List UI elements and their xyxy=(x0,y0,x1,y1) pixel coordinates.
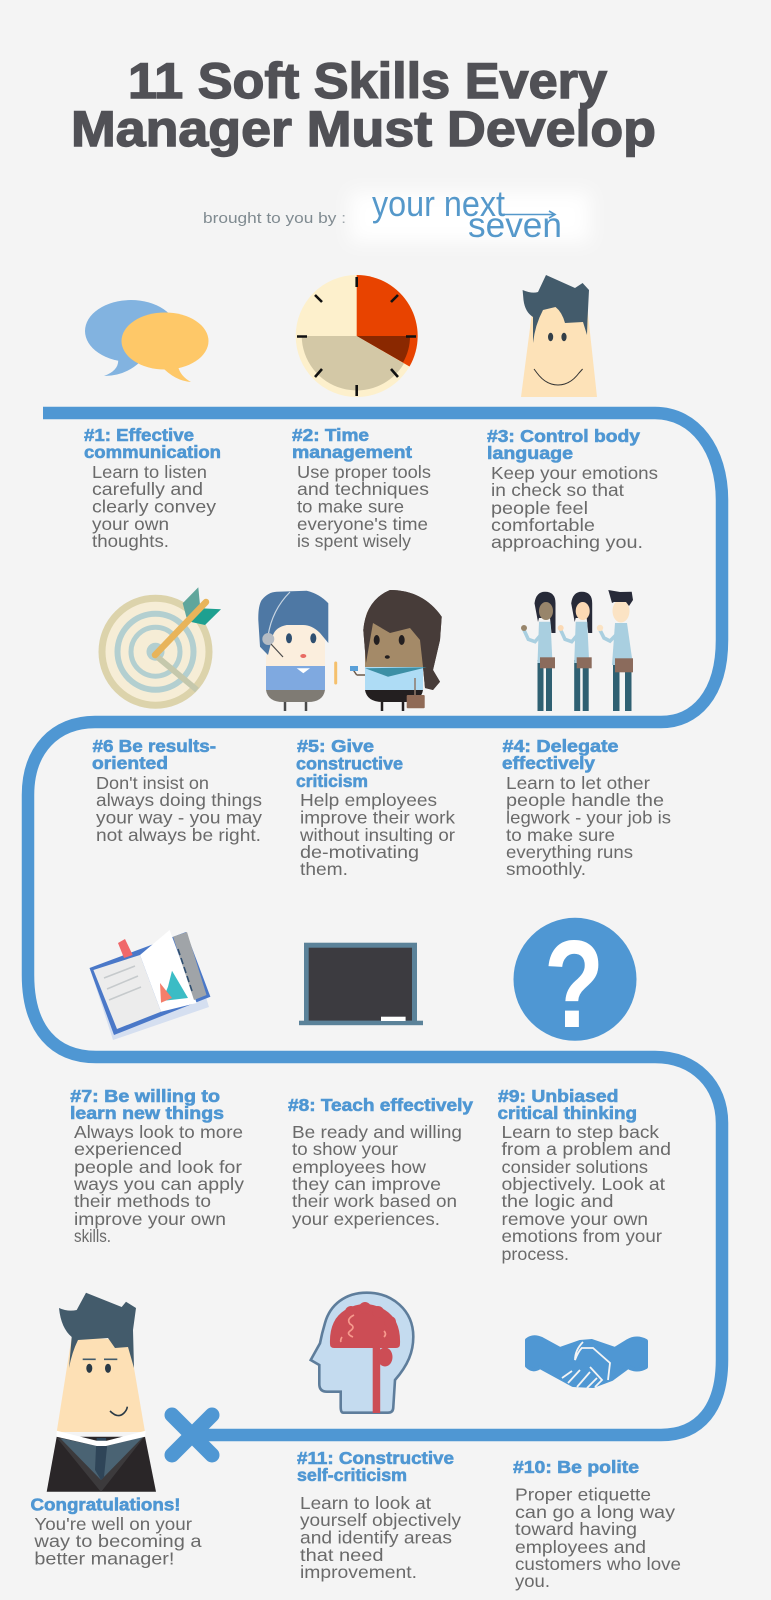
body text: you. xyxy=(515,1571,550,1591)
body text: your experiences. xyxy=(292,1209,440,1229)
body text: and identify areas xyxy=(300,1528,452,1548)
body text: to show your xyxy=(292,1139,398,1159)
body text: Proper etiquette xyxy=(515,1484,651,1504)
body text: that need xyxy=(300,1545,384,1565)
body text: Learn to look at xyxy=(300,1493,431,1513)
body text: better manager! xyxy=(34,1548,174,1568)
body text xyxy=(299,790,455,879)
heading xyxy=(498,1086,637,1123)
body text: legwork - your job is xyxy=(506,808,671,828)
body text: customers who love xyxy=(515,1554,681,1574)
title: 11 Soft Skills Every xyxy=(128,53,607,109)
body text xyxy=(515,1484,681,1591)
body text: yourself objectively xyxy=(300,1510,461,1530)
body text: Learn to step back xyxy=(502,1122,659,1142)
body text: objectively. Look at xyxy=(502,1174,665,1194)
panel: congratulations xyxy=(30,1494,202,1568)
body text: Keep your emotions xyxy=(491,463,658,483)
body text: to make sure xyxy=(297,496,404,516)
body text xyxy=(491,463,658,552)
body text: their methods to xyxy=(74,1191,211,1211)
icon: question mark xyxy=(514,916,636,1054)
body text: without insulting or xyxy=(299,825,455,845)
body text: to make sure xyxy=(506,825,615,845)
brain xyxy=(330,1302,400,1413)
body text: from a problem and xyxy=(502,1139,671,1159)
panel: skill 7 xyxy=(70,1086,244,1246)
body text: in check so that xyxy=(491,480,624,500)
colleague 1 xyxy=(521,592,556,711)
heading: #7: Be willing to xyxy=(70,1086,220,1106)
heading: criticism xyxy=(296,771,368,791)
body text: emotions from your xyxy=(502,1226,662,1246)
panel: skill 11 xyxy=(297,1448,461,1582)
heading xyxy=(502,736,619,773)
body text: everything runs xyxy=(506,842,633,862)
heading xyxy=(84,425,221,462)
icon: manager in suit xyxy=(47,1293,156,1492)
icon: smiling face xyxy=(521,275,597,397)
brought to you by line: brought to you by : xyxy=(203,210,346,227)
body text: they can improve xyxy=(292,1174,441,1194)
body text xyxy=(506,773,671,879)
body text xyxy=(96,773,262,845)
body text: improvement. xyxy=(300,1562,417,1582)
body text xyxy=(33,1514,202,1568)
icon: three colleagues xyxy=(521,590,633,711)
panel: skill 5 xyxy=(296,736,455,879)
heading xyxy=(296,736,403,791)
body text xyxy=(92,462,216,551)
body text: them. xyxy=(300,859,348,879)
heading: #3: Control body xyxy=(487,426,640,446)
panel: skill 8 xyxy=(288,1095,473,1229)
body text: You're well on your xyxy=(34,1514,192,1534)
body text: comfortable xyxy=(491,515,595,535)
icon: speech bubbles xyxy=(85,300,208,382)
heading: #6 Be results- xyxy=(92,736,216,756)
heading: effectively xyxy=(502,753,595,773)
body text: skills. xyxy=(74,1226,111,1246)
body text: carefully and xyxy=(92,479,203,499)
heading: critical thinking xyxy=(498,1103,637,1123)
body text: Always look to more xyxy=(74,1122,243,1142)
body text xyxy=(300,1493,461,1582)
heading xyxy=(297,1448,454,1485)
body text: toward having xyxy=(515,1519,637,1539)
body text: process. xyxy=(502,1244,569,1264)
winding path xyxy=(28,413,722,1435)
colleague 2 xyxy=(558,592,592,711)
body text: people handle the xyxy=(506,790,664,810)
body text xyxy=(502,1122,671,1264)
icon: end cross xyxy=(172,1415,212,1455)
heading: #4: Delegate xyxy=(502,736,619,756)
body text: the logic and xyxy=(502,1191,614,1211)
body text: Learn to listen xyxy=(92,462,207,482)
icon: head with brain xyxy=(311,1293,413,1413)
icon: question mark: ? xyxy=(544,916,604,1054)
body text: not always be right. xyxy=(96,825,261,845)
heading: #2: Time xyxy=(292,425,369,445)
body text xyxy=(73,1122,244,1246)
body text: can go a long way xyxy=(515,1502,675,1522)
body text xyxy=(297,462,431,551)
body text: way to becoming a xyxy=(33,1531,202,1551)
panel: skill 6 xyxy=(92,736,262,845)
heading: constructive xyxy=(296,754,403,774)
heading: #9: Unbiased xyxy=(498,1086,618,1106)
icon: two customer agents xyxy=(258,590,442,711)
body text: thoughts. xyxy=(92,531,169,551)
heading: #1: Effective xyxy=(84,425,194,445)
body text: your way - you may xyxy=(96,808,262,828)
panel: skill 4 xyxy=(502,736,671,879)
icon: open book xyxy=(90,930,210,1040)
body text xyxy=(292,1122,462,1229)
body text: Use proper tools xyxy=(297,462,431,482)
body text: your own xyxy=(92,514,169,534)
body text: Don't insist on xyxy=(96,773,209,793)
body text: Be ready and willing xyxy=(292,1122,462,1142)
body text: employees and xyxy=(515,1537,646,1557)
icon: blackboard xyxy=(299,943,423,1025)
heading: self-criticism xyxy=(297,1465,407,1485)
title xyxy=(71,53,656,157)
heading: #10: Be polite xyxy=(513,1457,639,1477)
heading: language xyxy=(487,443,573,463)
logo: your next seven xyxy=(350,183,590,245)
icon: handshake xyxy=(527,1337,646,1388)
title: Manager Must Develop xyxy=(71,101,656,157)
body text: remove your own xyxy=(502,1209,648,1229)
logo: your next seven: seven xyxy=(468,206,562,245)
heading: #8: Teach effectively xyxy=(288,1095,473,1115)
heading xyxy=(70,1086,224,1123)
heading xyxy=(487,426,640,463)
colleague 3 xyxy=(597,590,633,711)
heading: management xyxy=(292,442,412,462)
heading: #11: Constructive xyxy=(297,1448,454,1468)
body text: approaching you. xyxy=(491,532,643,552)
heading: #5: Give xyxy=(297,736,374,756)
body text: is spent wisely xyxy=(297,531,411,551)
body text: and techniques xyxy=(297,479,429,499)
icon: clock xyxy=(296,275,418,397)
body text: everyone's time xyxy=(297,514,428,534)
body text: their work based on xyxy=(292,1191,457,1211)
body text: improve their work xyxy=(300,808,455,828)
body text: employees how xyxy=(292,1157,426,1177)
panel: skill 3 xyxy=(487,426,658,552)
body text: smoothly. xyxy=(506,859,586,879)
body text: de-motivating xyxy=(300,842,419,862)
agent with briefcase xyxy=(350,590,442,711)
body text: always doing things xyxy=(96,790,262,810)
heading xyxy=(92,736,216,773)
heading: oriented xyxy=(92,753,168,773)
agent with headset xyxy=(258,591,336,711)
heading: learn new things xyxy=(70,1103,224,1123)
heading: communication xyxy=(84,442,221,462)
body text: people feel xyxy=(491,498,588,518)
body text: people and look for xyxy=(74,1157,242,1177)
heading xyxy=(292,425,412,462)
panel: skill 9 xyxy=(498,1086,671,1264)
body text: clearly convey xyxy=(92,496,216,516)
panel: skill 1 xyxy=(84,425,221,551)
icon: target with arrow xyxy=(98,587,221,709)
body text: ways you can apply xyxy=(73,1174,244,1194)
logo: your next seven: your next xyxy=(372,183,505,224)
panel: skill 10 xyxy=(513,1457,681,1591)
body text: Learn to let other xyxy=(506,773,650,793)
body text: improve your own xyxy=(74,1209,226,1229)
body text: consider solutions xyxy=(502,1157,648,1177)
panel: skill 2 xyxy=(292,425,431,551)
body text: Help employees xyxy=(300,790,437,810)
body text: experienced xyxy=(74,1139,182,1159)
heading: Congratulations! xyxy=(30,1494,180,1514)
